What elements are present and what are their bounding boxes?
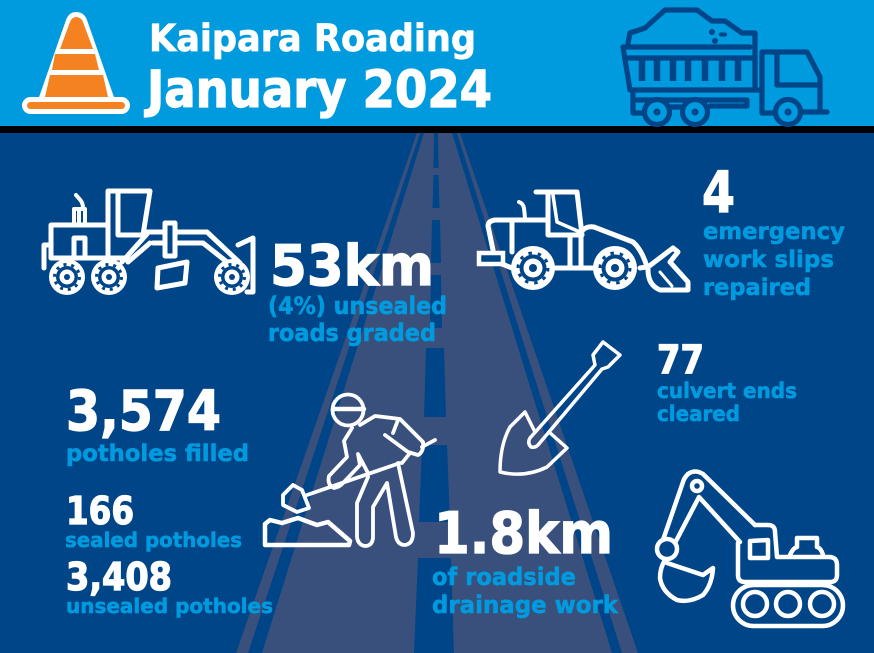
stat: 53km graded: roads graded	[268, 319, 436, 347]
stat: 77 culverts	[657, 338, 797, 426]
stat: potholes: potholes filled	[66, 441, 249, 467]
icon: shovel	[500, 342, 620, 474]
stat: 1.8km drainage: of roadside	[432, 563, 576, 591]
stat: 1.8km drainage	[432, 501, 619, 619]
title: Kaipara Roading	[149, 17, 476, 60]
icon: excavator	[657, 472, 843, 626]
header banner	[0, 0, 874, 133]
stat: 53km graded: 53km	[270, 234, 434, 299]
stat: 1.8km drainage: 1.8km	[434, 501, 613, 567]
stat: potholes: sealed potholes	[65, 528, 242, 552]
stat: 53km graded	[268, 234, 447, 347]
icon: traffic cone	[22, 12, 130, 114]
stat: 4 emergency slips	[702, 160, 845, 301]
stat: potholes: unsealed potholes	[66, 594, 273, 618]
stat: 4 emergency slips: work slips	[703, 247, 834, 273]
stat: 1.8km drainage: drainage work	[432, 591, 619, 619]
stat: potholes	[65, 379, 273, 618]
icon: road grader	[44, 191, 253, 295]
stat: 4 emergency slips: 4	[702, 160, 735, 226]
stat: potholes: 3,408	[66, 555, 172, 599]
icon: dump truck	[623, 10, 827, 124]
stat: 77 culverts: culvert ends	[657, 379, 797, 403]
stat: 4 emergency slips: repaired	[703, 275, 811, 301]
icon: wheel loader	[479, 192, 688, 290]
title	[144, 17, 492, 120]
icon: worker with shovel	[265, 394, 435, 546]
stat: potholes: 166	[66, 489, 134, 533]
stat: 4 emergency slips: emergency	[703, 219, 845, 245]
stat: 77 culverts: 77	[657, 338, 704, 383]
title: January 2024	[144, 61, 492, 120]
road illustration	[236, 133, 638, 653]
stat: potholes: 3,574	[66, 379, 221, 443]
stat: 77 culverts: cleared	[657, 402, 740, 426]
stat: 53km graded: (4%) unsealed	[268, 292, 447, 320]
